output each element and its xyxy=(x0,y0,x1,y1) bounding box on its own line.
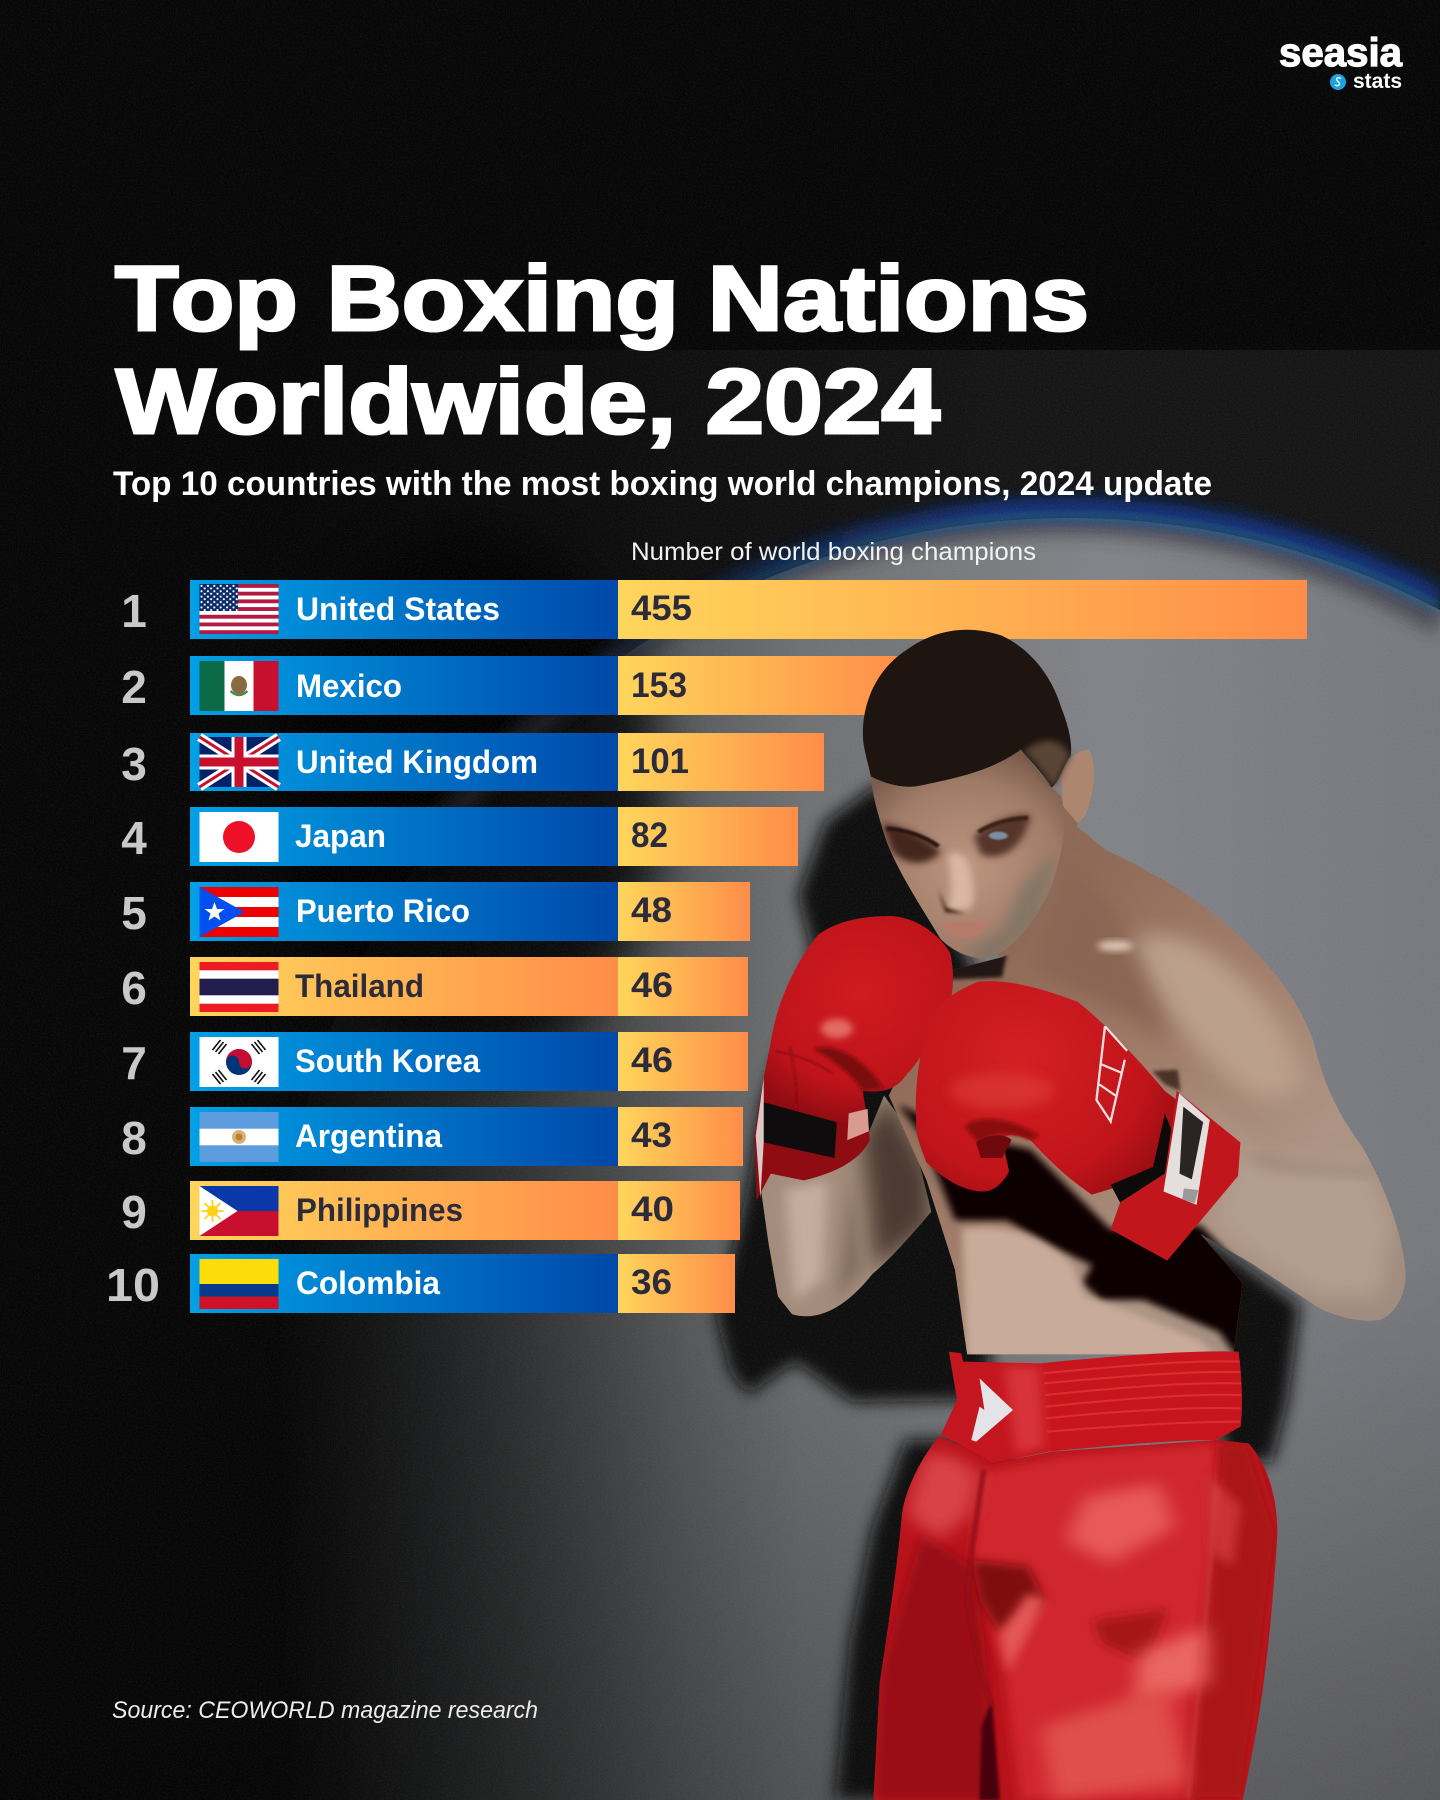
row 1: United States xyxy=(121,580,1307,639)
row 9: Philippines: 9 xyxy=(121,1186,147,1238)
row 2: Mexico: Mexico xyxy=(296,668,402,704)
glove print xyxy=(1096,1026,1127,1121)
row 3: United Kingdom: 3 xyxy=(121,738,147,790)
row 8: Argentina: Argentina xyxy=(295,1118,442,1154)
row 9: Philippines: 40 xyxy=(631,1190,674,1229)
logo: seasia stats: seasia xyxy=(1279,31,1403,75)
logo mark xyxy=(971,1378,1013,1442)
shorts body xyxy=(873,1437,1277,1800)
left forearm xyxy=(759,1096,931,1316)
row 10: Colombia: Colombia xyxy=(296,1265,440,1301)
flag: Japan xyxy=(200,812,278,862)
flag: United States xyxy=(200,584,278,634)
waistband elastic xyxy=(1041,1351,1242,1452)
boxer: shorts xyxy=(873,1351,1277,1800)
face xyxy=(871,750,1064,958)
row 1: United States: 455 xyxy=(631,589,692,628)
row 2: Mexico: 153 xyxy=(631,666,687,705)
hair xyxy=(863,630,1071,787)
row 9: Philippines: Philippines xyxy=(296,1192,463,1228)
ranking bar chart xyxy=(106,580,1307,1313)
ear xyxy=(1061,750,1094,824)
row 8: Argentina: 8 xyxy=(121,1112,147,1164)
icon: logo dot xyxy=(1330,74,1346,90)
neck shadow xyxy=(997,801,1078,957)
flag: Puerto Rico xyxy=(200,887,278,937)
head xyxy=(863,630,1094,962)
flag: United Kingdom xyxy=(200,737,278,787)
row 6: Thailand: Thailand xyxy=(295,968,424,1004)
boxer: upper body xyxy=(754,630,1406,1359)
lips xyxy=(941,921,989,938)
row 5: Puerto Rico: Puerto Rico xyxy=(296,893,470,929)
row 10: Colombia: 10 xyxy=(106,1259,160,1311)
row 4: Japan: 4 xyxy=(121,812,147,864)
row 7: South Korea: 46 xyxy=(631,1041,673,1080)
row 7: South Korea: South Korea xyxy=(295,1043,480,1079)
row 4: Japan xyxy=(121,807,798,866)
flag: Thailand xyxy=(200,962,278,1012)
row 8: Argentina: 43 xyxy=(631,1116,672,1155)
row 10: Colombia xyxy=(106,1254,735,1313)
row 6: Thailand: 46 xyxy=(631,966,673,1005)
wall shadow of the boxer xyxy=(716,782,1300,1800)
eye sockets xyxy=(882,823,941,863)
row 3: United Kingdom xyxy=(121,733,824,791)
flag: South Korea xyxy=(200,1037,278,1087)
boxer illustration xyxy=(754,630,1406,1800)
title xyxy=(115,248,1089,453)
row 2: Mexico xyxy=(121,656,903,715)
shadow below gloves xyxy=(898,1104,1257,1359)
subtitle: Top 10 countries with the most boxing world champions, 2024 update xyxy=(113,465,1212,503)
source note: Source: CEOWORLD magazine research xyxy=(112,1697,538,1724)
flag: Mexico xyxy=(200,661,278,711)
row 10: Colombia: 36 xyxy=(631,1263,672,1302)
title: Worldwide, 2024 xyxy=(116,351,940,453)
row 3: United Kingdom: United Kingdom xyxy=(296,744,538,780)
row 5: Puerto Rico: 48 xyxy=(631,891,672,930)
left glove xyxy=(754,916,953,1200)
right glove xyxy=(916,981,1177,1203)
row 7: South Korea: 7 xyxy=(121,1037,147,1089)
flag: Argentina xyxy=(200,1112,278,1162)
row 6: Thailand: 6 xyxy=(121,962,147,1014)
lit abdomen xyxy=(962,1228,1219,1359)
row 9: Philippines xyxy=(121,1181,740,1240)
row 8: Argentina xyxy=(121,1107,743,1166)
shoulder muscle shading xyxy=(1130,935,1304,1098)
row 4: Japan: Japan xyxy=(295,818,386,854)
stubble xyxy=(968,856,1058,958)
row 3: United Kingdom: 101 xyxy=(631,742,689,781)
row 5: Puerto Rico: 5 xyxy=(121,887,147,939)
right glove cuff xyxy=(1111,1091,1240,1261)
torso and right arm xyxy=(889,823,1406,1359)
row 7: South Korea xyxy=(121,1032,748,1091)
axis label: Number of world boxing champions xyxy=(631,538,1036,566)
waistband flap xyxy=(941,1352,1049,1463)
row 1: United States: 1 xyxy=(121,585,147,637)
row 2: Mexico: 2 xyxy=(121,661,147,713)
row 1: United States: United States xyxy=(296,591,500,627)
row 5: Puerto Rico xyxy=(121,882,750,941)
flag: Philippines xyxy=(200,1186,278,1236)
logo: seasia stats: stats xyxy=(1353,70,1402,93)
nose xyxy=(948,853,974,912)
row 4: Japan: 82 xyxy=(631,816,668,855)
title: Top Boxing Nations xyxy=(115,248,1089,350)
row 6: Thailand xyxy=(121,957,748,1016)
flag: Colombia xyxy=(200,1259,278,1309)
